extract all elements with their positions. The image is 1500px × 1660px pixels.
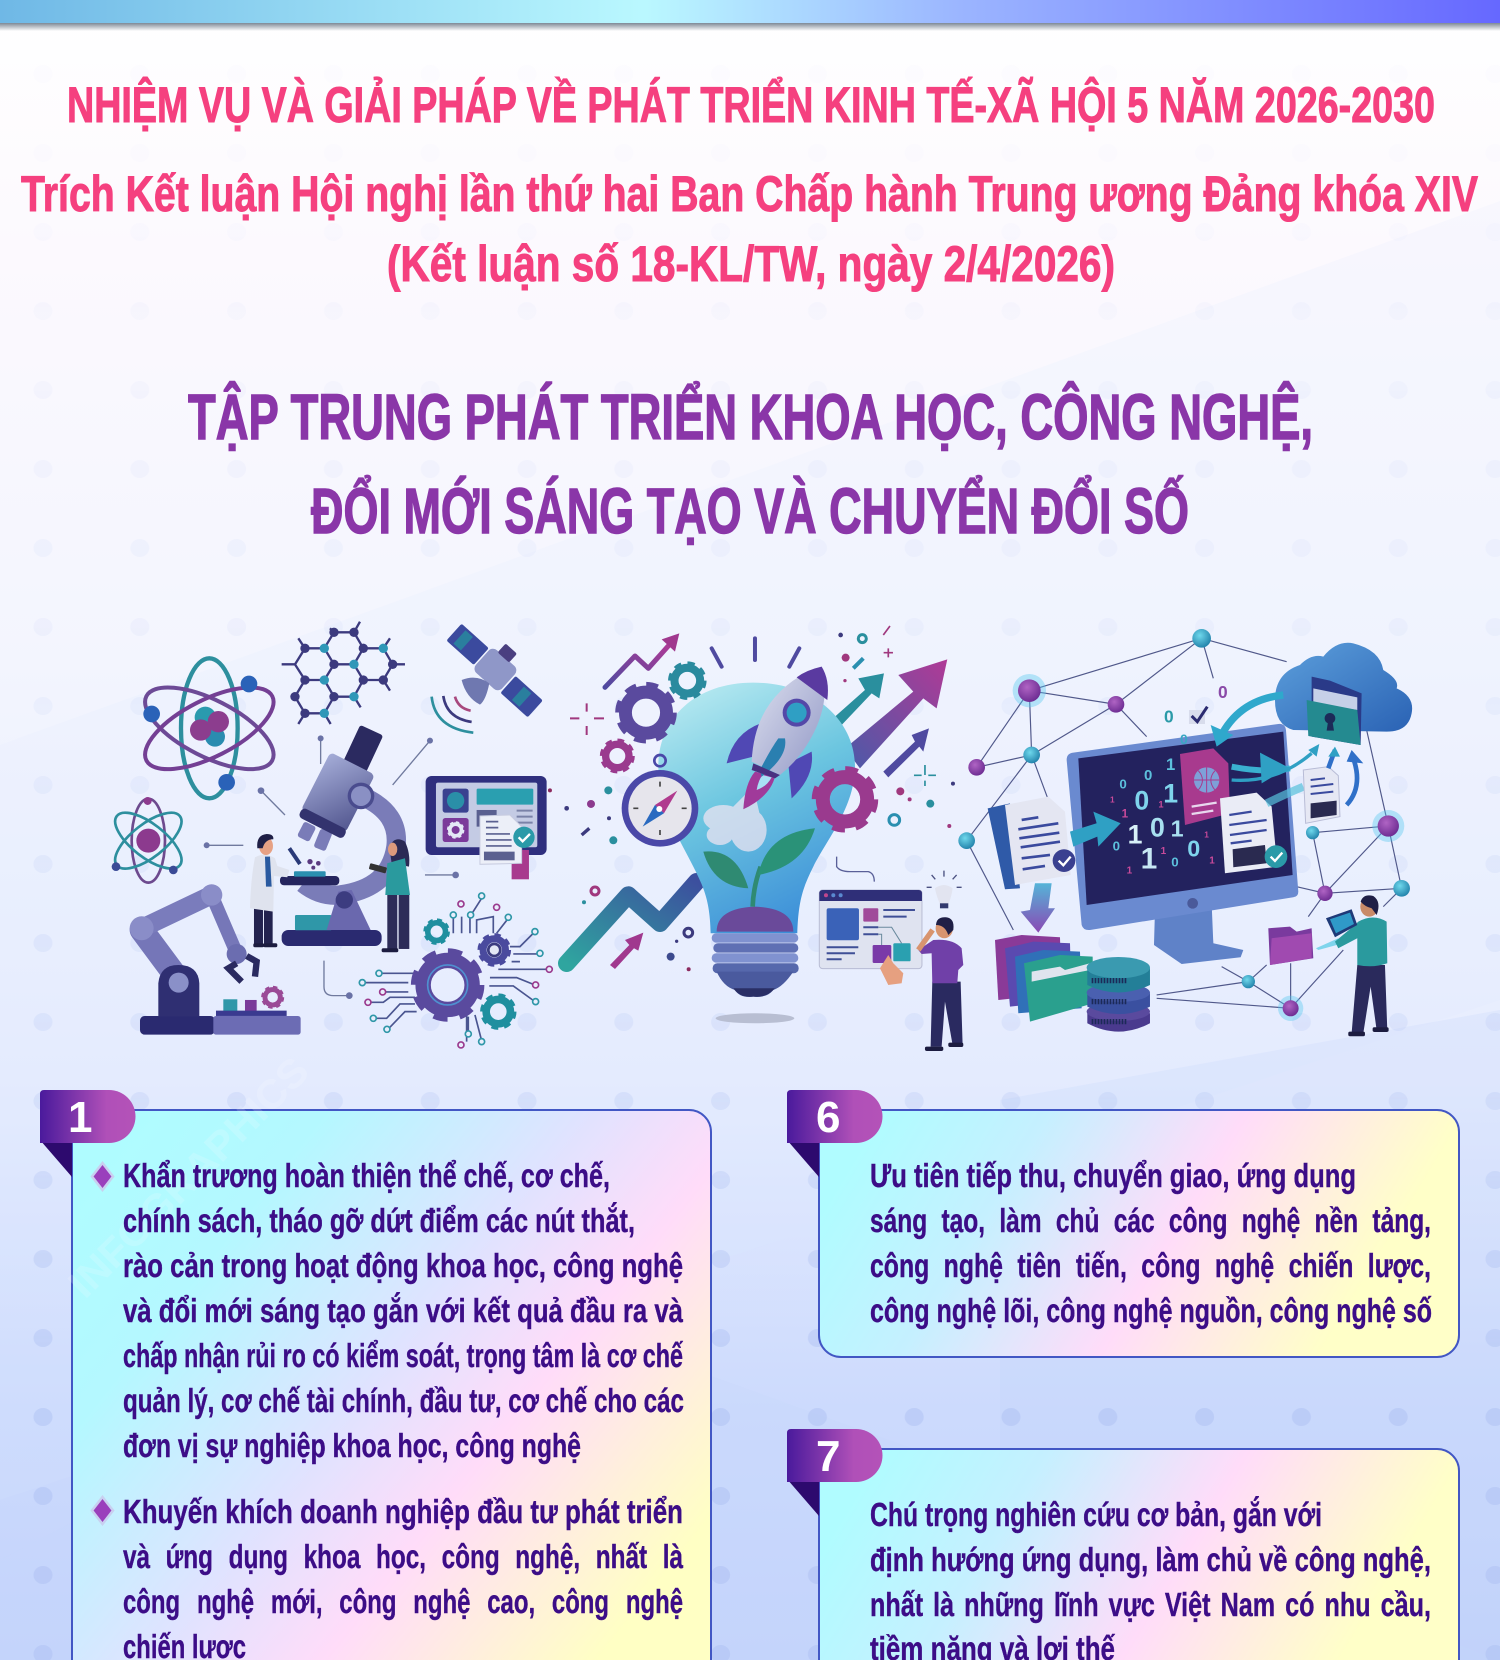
icon: small atom: [107, 797, 190, 883]
header: resolution title: [21, 76, 1478, 292]
text: second paragraph: [123, 1493, 683, 1660]
binary digits on screen: 0: [1180, 731, 1188, 747]
icon: growth arrows: [567, 633, 947, 969]
text: card 7 body: Chú trọng nghiên cứu cơ bản, gắn với: [870, 1496, 1322, 1533]
icon: microscope: [280, 725, 396, 946]
text: second paragraph: công nghệ mới, công nghệ cao, công nghệ: [123, 1583, 683, 1620]
binary digits on screen: 0: [1144, 767, 1152, 784]
text: first paragraph: chấp nhận rủi ro có kiểm soát, trọng tâm là cơ chế: [123, 1337, 683, 1374]
binary digits on screen: 1: [1171, 816, 1184, 842]
icon: small barcode document: [1303, 747, 1363, 823]
icon: light bulb: [658, 683, 855, 1023]
illustration: innovation light bulb: [564, 626, 963, 1051]
text: card 6 body: Ưu tiên tiếp thu, chuyển giao, ứng dụng: [870, 1157, 1356, 1194]
top gradient bar: [0, 0, 1500, 31]
panel: card 6: [787, 1090, 1459, 1357]
badge: number 1: [40, 1090, 136, 1177]
illustration: digital transformation: [958, 629, 1412, 1036]
binary digits on screen: [1110, 682, 1228, 876]
badge: number 6: [787, 1090, 882, 1177]
text: card 7 body: [870, 1496, 1431, 1660]
icon: rocket: [727, 667, 828, 809]
binary digits on screen: 0: [1187, 836, 1200, 862]
icon: plant sprout: [703, 828, 815, 907]
binary digits on screen: 1: [1166, 755, 1175, 774]
icon: database: [1087, 957, 1150, 1032]
binary digits on screen: 0: [1113, 839, 1120, 854]
text: second paragraph: Khuyến khích doanh nghiệp đầu tư phát triển: [123, 1493, 683, 1530]
binary digits on screen: 1: [1122, 807, 1129, 820]
text: first paragraph: đơn vị sự nghiệp khoa học, công nghệ: [123, 1427, 581, 1464]
text: first paragraph: và đổi mới sáng tạo gắn với kết quả đầu ra và: [123, 1292, 684, 1329]
figure: person with tablet: [1326, 895, 1389, 1036]
icon: down arrow: [1021, 883, 1055, 933]
text: first paragraph: Khẩn trương hoàn thiện thể chế, cơ chế,: [123, 1157, 610, 1194]
text: first paragraph: quản lý, cơ chế tài chính, đầu tư, cơ chế cho các: [123, 1382, 684, 1419]
icon: tablet with document: [426, 776, 552, 879]
icon: circuit gears: [359, 893, 552, 1048]
text: first paragraph: chính sách, tháo gỡ dứt điểm các nút thắt,: [123, 1202, 635, 1239]
icon: purple folder: [1268, 927, 1338, 965]
illustration: science and research: [107, 622, 552, 1048]
binary digits on screen: 0: [1171, 855, 1179, 870]
text: second paragraph: và ứng dụng khoa học, công nghệ, nhất là: [123, 1538, 683, 1575]
bullet: diamond: [92, 1163, 113, 1190]
binary digits on screen: 0: [1164, 707, 1174, 727]
icon: cloud with locked folder: [1211, 643, 1412, 747]
binary digits on screen: 1: [1204, 829, 1209, 839]
icon: molecule lattice: [282, 622, 405, 724]
figure: scientist: [250, 834, 300, 947]
panel: card 1: [40, 1049, 711, 1660]
binary digits on screen: 1: [1163, 779, 1178, 809]
text: first paragraph: rào cản trong hoạt động khoa học, công nghệ: [123, 1247, 683, 1284]
network lines: [967, 638, 1402, 1008]
badge: number 7: 7: [816, 1432, 840, 1481]
icon: documents on screen: [1180, 744, 1319, 873]
icon: gears: [601, 663, 876, 830]
icon: check box: [1189, 707, 1207, 724]
binary digits on screen: 1: [1158, 799, 1164, 809]
binary digits on screen: 1: [1161, 846, 1167, 857]
binary digits on screen: 1: [1128, 819, 1143, 849]
binary digits on screen: 1: [1110, 795, 1115, 805]
icon: folder stack: [995, 935, 1093, 1022]
connector lines: [204, 735, 459, 999]
text: card 6 body: [870, 1157, 1432, 1329]
badge: number 7: [787, 1429, 882, 1516]
figure: researcher with tablet: [369, 839, 410, 952]
bullet: diamond: [92, 1497, 113, 1524]
icon: web flow panel: [819, 857, 922, 985]
icon: left document: [988, 797, 1121, 889]
binary digits on screen: 0: [1134, 785, 1149, 815]
badge: number 6: 6: [816, 1093, 840, 1142]
network nodes: [958, 629, 1410, 1021]
header: resolution title: (Kết luận số 18-KL/TW, ngày 2/4/2026): [387, 236, 1115, 292]
icon: satellite: [432, 624, 543, 733]
binary digits on screen: 1: [1127, 865, 1133, 876]
binary digits on screen: 1: [1141, 842, 1157, 875]
decorative rays and particles: [564, 626, 955, 971]
text: first paragraph: [123, 1157, 684, 1464]
binary digits on screen: 0: [1150, 813, 1165, 843]
panel: card 7: [787, 1429, 1459, 1660]
badge: number 1: 1: [68, 1093, 92, 1142]
watermark: INFOGRAPHICS: [60, 1049, 318, 1306]
figure: man thinking: [918, 871, 963, 1051]
binary digits on screen: 1: [1209, 855, 1215, 866]
binary digits on screen: 0: [1218, 682, 1228, 702]
binary digits on screen: 0: [1119, 776, 1127, 791]
icon: robot arm: [130, 884, 301, 1035]
icon: compass: [622, 755, 698, 847]
main heading: [188, 380, 1313, 547]
icon: large atom: [134, 658, 285, 798]
icon: monitor: [1067, 724, 1298, 964]
